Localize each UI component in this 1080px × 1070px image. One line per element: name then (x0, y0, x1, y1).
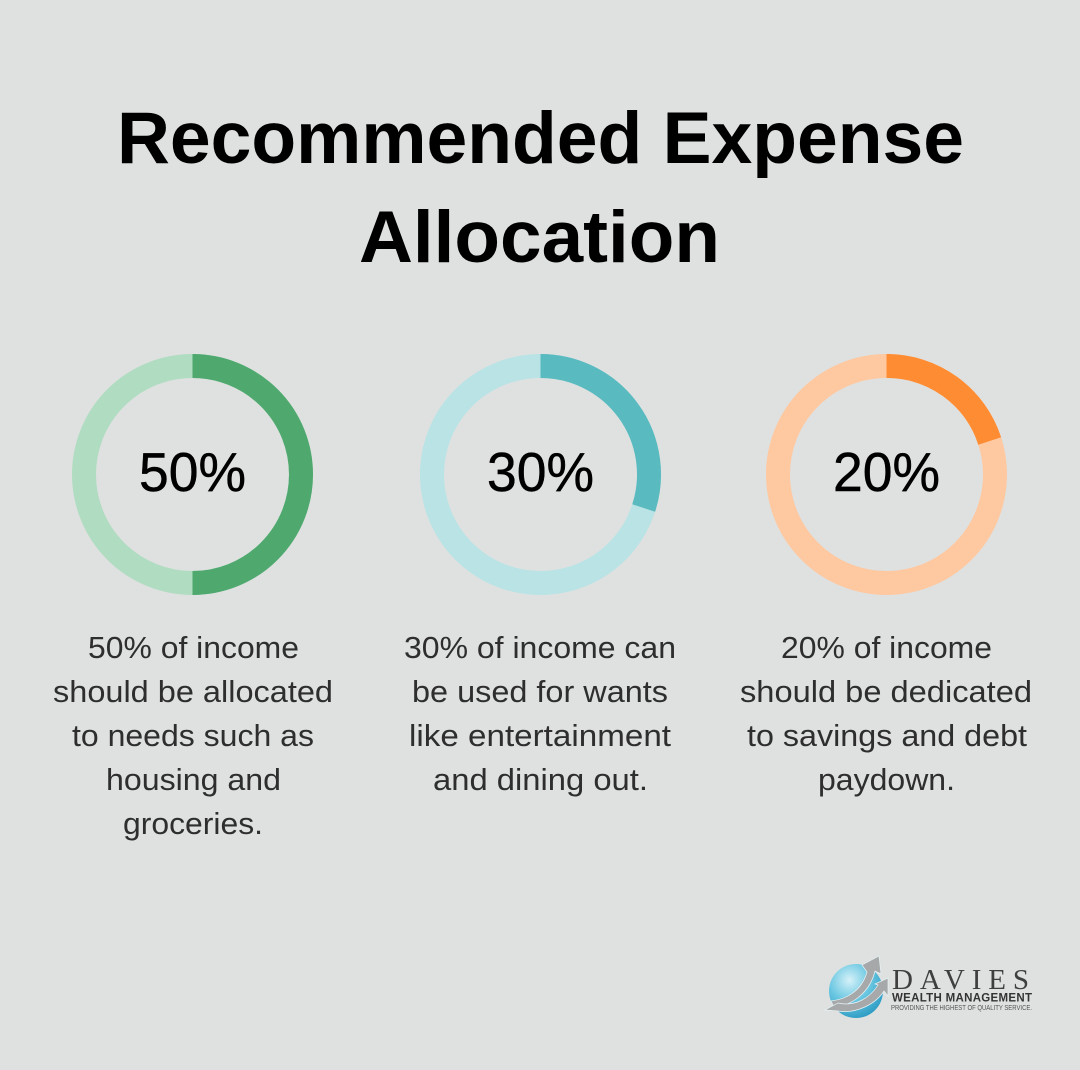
title: Allocation (359, 197, 720, 278)
description: wants: and dining out. (433, 762, 648, 797)
description: savings: should be dedicated (740, 674, 1032, 709)
logo subtitle: WEALTH MANAGEMENT (892, 992, 1032, 1004)
value: 30%: 30% (487, 441, 594, 503)
panel: 20% savings (740, 366, 1032, 797)
description: wants: like entertainment (409, 718, 671, 753)
description: needs: to needs such as (72, 718, 314, 753)
logo tagline: PROVIDING THE HIGHEST OF QUALITY SERVICE. (891, 1005, 1032, 1012)
value: 20%: 20% (833, 441, 940, 503)
description: wants: 30% of income can (404, 630, 676, 665)
title: Recommended Expense (117, 98, 964, 179)
description: savings: to savings and debt (747, 718, 1027, 753)
description: wants (404, 630, 676, 797)
panel: 50% needs (53, 366, 333, 841)
description: savings (740, 630, 1032, 797)
panel: 30% wants (404, 366, 676, 797)
description: needs: housing and (106, 762, 281, 797)
description: savings: paydown. (818, 762, 955, 797)
icon: globe with arrows (825, 956, 888, 1018)
description: savings: 20% of income (781, 630, 992, 665)
donut chart: 30% (432, 366, 649, 583)
donut chart: 50% (84, 366, 301, 583)
title (117, 98, 964, 278)
description: needs (53, 630, 333, 841)
description: needs: groceries. (123, 806, 263, 841)
value: 50%: 50% (139, 441, 246, 503)
logo wordmark: DAVIES (892, 964, 1029, 996)
description: needs: 50% of income (88, 630, 299, 665)
donut chart: 20% (778, 366, 995, 583)
description: wants: be used for wants (412, 674, 668, 709)
logo: Davies Wealth Management (825, 956, 1032, 1018)
description: needs: should be allocated (53, 674, 333, 709)
